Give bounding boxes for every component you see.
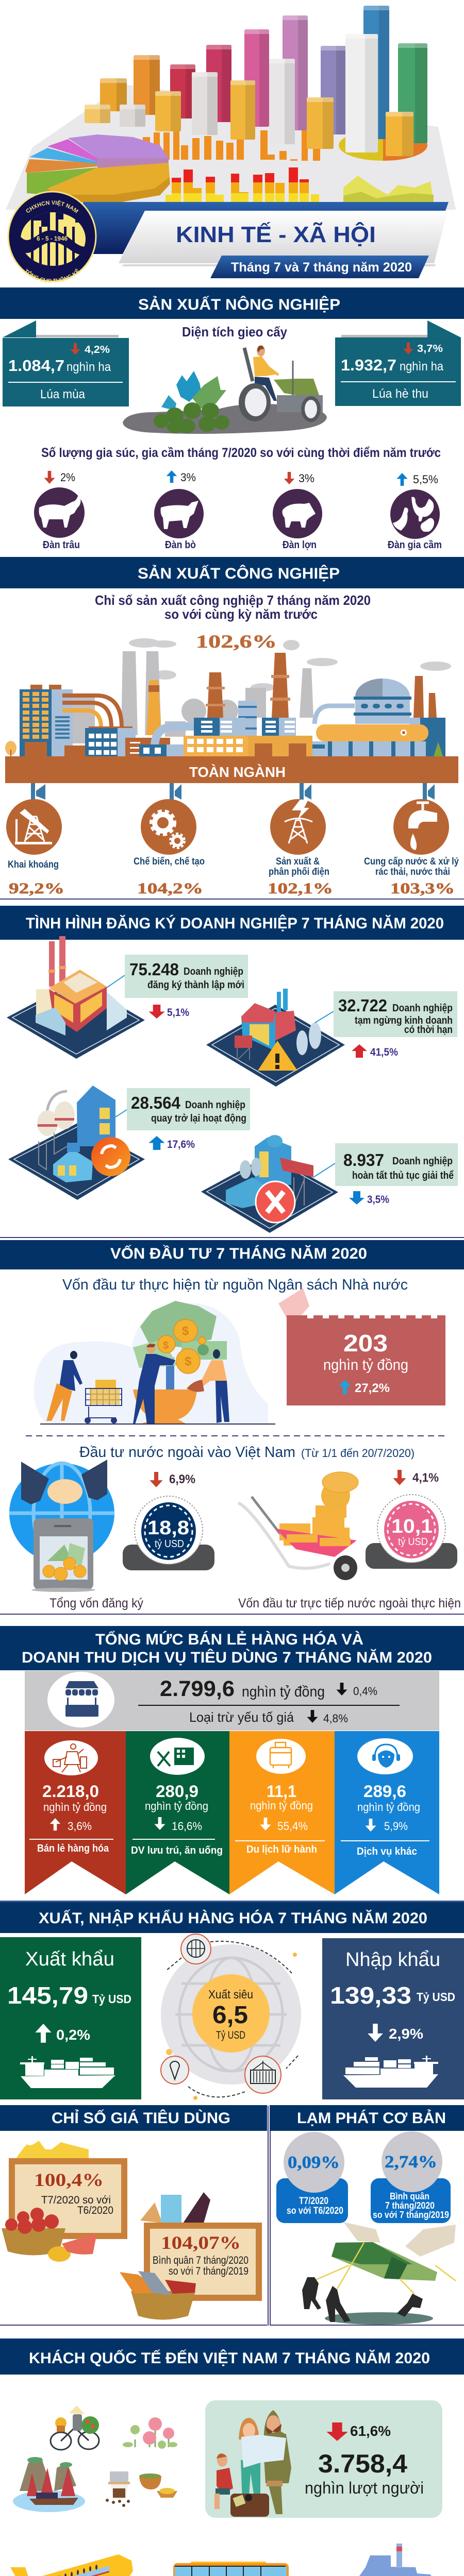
stat: core inflation average: 7 tháng/2020	[385, 2200, 435, 2211]
card: air	[6, 2554, 150, 2576]
illustration: suspended enterprise	[206, 989, 345, 1087]
column: other services: 5,9%	[384, 1820, 408, 1833]
panel: imports	[322, 1938, 464, 2099]
stat: dissolved enterprises: 8.937	[343, 1150, 384, 1170]
panel: retail total: Loại trừ yếu tố giá	[189, 1709, 294, 1725]
heading: industrial production index: so với cùng kỳ năm trước	[164, 606, 318, 622]
logo: Tổng cục Thống kê: CHXHCN VIỆT NAM	[26, 200, 78, 213]
section heading: core inflation	[270, 2105, 464, 2131]
section heading: trade: XUẤT, NHẬP KHẨU HÀNG HÓA 7 THÁNG NĂM 2020	[39, 1909, 427, 1927]
column: travel: Du lịch lữ hành	[246, 1844, 317, 1855]
panel: exports: Tỷ USD	[92, 1992, 131, 2006]
chart: trade surplus globe: 6,5	[212, 2002, 248, 2029]
title banner	[83, 202, 449, 278]
panel: retail total: 0,4%	[353, 1685, 377, 1698]
illustration: winged money	[302, 2222, 456, 2325]
card: sea	[317, 2544, 459, 2576]
panel: total tourists: nghìn lượt người	[305, 2479, 424, 2497]
panel: exports: 0,2%	[56, 2027, 90, 2043]
column: travel: 11,1	[267, 1782, 296, 1801]
illustration: tourist family	[214, 2410, 291, 2517]
stat: registered capital badge: 18,8	[147, 1517, 189, 1539]
item: pigs	[273, 472, 322, 551]
illustration: new enterprise factory	[7, 936, 145, 1059]
section heading: retail	[0, 1626, 464, 1670]
illustration: money tree: $	[163, 1340, 169, 1351]
stat: implemented FDI badge: tỷ USD	[398, 1536, 428, 1548]
heading: state budget investment: Vốn đầu tư thực hiện từ nguồn Ngân sách Nhà nước	[62, 1277, 408, 1293]
value: overall index: 102,6%	[196, 631, 277, 652]
heading: industrial production index	[95, 592, 371, 622]
panel: Lúa hè thu: 3,7%	[417, 343, 443, 354]
item: pigs: Đàn lợn	[283, 539, 317, 551]
stat: suspended enterprises: 41,5%	[370, 1046, 398, 1058]
item: cattle	[154, 470, 204, 551]
section heading: trade	[0, 1901, 464, 1933]
stat: core inflation July: T7/2020	[299, 2196, 328, 2207]
sign: CPI July: T7/2020 so với	[41, 2194, 111, 2206]
column: other services: 289,6	[363, 1782, 406, 1801]
panel: Lúa hè thu: Lúa hè thu	[372, 387, 428, 401]
sign: CPI July: 100,4%	[34, 2170, 104, 2190]
logo: Tổng cục Thống kê	[7, 191, 97, 283]
stat: core inflation average: 2,74%	[385, 2153, 437, 2172]
stat: suspended enterprises	[334, 991, 457, 1058]
stat: new enterprises: Doanh nghiệp	[184, 966, 243, 977]
item: buffalo: Đàn trâu	[43, 539, 80, 551]
panel: exports: 145,79	[7, 1982, 88, 2009]
item: cattle: Đàn bò	[165, 539, 196, 551]
stat: implemented FDI badge	[366, 1470, 457, 1569]
column: accommodation and food: DV lưu trú, ăn uống	[131, 1845, 223, 1856]
column: other services: Dịch vụ khác	[357, 1846, 417, 1857]
heading: foreign investment: (Từ 1/1 đến 20/7/2020)	[301, 1447, 415, 1460]
panel: state budget value: 203	[343, 1330, 388, 1357]
column: travel: nghìn tỷ đồng	[250, 1799, 313, 1812]
panel: state budget value	[278, 1288, 445, 1405]
illustration: wheelbarrow and coins	[238, 1472, 461, 1611]
item: poultry: Đàn gia cầm	[388, 539, 442, 551]
item: electricity: 102,1%	[268, 880, 333, 897]
logo: Tổng cục Thống kê: 6 - 5 - 1946	[37, 235, 68, 242]
stat: registered capital badge	[123, 1472, 214, 1570]
section heading: industry	[0, 557, 464, 588]
stat: core inflation average: Bình quân	[390, 2191, 429, 2201]
panel: Lúa mùa	[3, 320, 129, 406]
item: manufacturing: 104,2%	[137, 880, 203, 897]
section heading: enterprises	[0, 906, 464, 940]
column: travel	[229, 1731, 335, 1894]
heading: foreign investment: Đầu tư nước ngoài vào Việt Nam	[79, 1444, 295, 1461]
heading: planted area: Diện tích gieo cấy	[182, 324, 287, 340]
heading: industrial production index: Chỉ số sản xuất công nghiệp 7 tháng năm 2020	[95, 592, 371, 608]
section heading: agriculture: SẢN XUẤT NÔNG NGHIỆP	[138, 296, 340, 313]
sign: CPI July: T6/2020	[77, 2205, 113, 2216]
panel: retail total: 2.799,6	[160, 1676, 235, 1701]
column: accommodation and food: 280,9	[156, 1782, 198, 1801]
panel: Lúa mùa: 4,2%	[85, 344, 110, 355]
panel: Lúa hè thu: nghìn ha	[400, 360, 444, 374]
section heading: enterprises: TÌNH HÌNH ĐĂNG KÝ DOANH NGHIỆP 7 THÁNG NĂM 2020	[26, 914, 444, 932]
column: travel: 55,4%	[277, 1820, 308, 1833]
heading: foreign investment	[79, 1444, 415, 1461]
panel: total tourists: 61,6%	[350, 2423, 391, 2439]
band: whole industry: TOÀN NGÀNH	[189, 764, 286, 780]
panel: Lúa mùa: nghìn ha	[67, 360, 111, 374]
sign: CPI seven-month average	[120, 2192, 259, 2319]
item: manufacturing	[134, 783, 205, 897]
stat: dissolved enterprises: 3,5%	[367, 1194, 389, 1206]
panel: Lúa hè thu: 1.932,7	[341, 356, 396, 374]
illustration: money tree: $	[182, 1324, 189, 1338]
card: road	[163, 2562, 307, 2576]
chart: trade surplus globe: Tỷ USD	[216, 2029, 245, 2041]
item: water supply	[364, 783, 459, 897]
illustration: handshake and donation box: Tổng vốn đăng ký	[49, 1596, 143, 1611]
column: retail of goods	[25, 1731, 126, 1894]
panel: imports: 2,9%	[389, 2026, 423, 2042]
section heading: tourists	[0, 2338, 464, 2375]
illustration: money tree: $	[185, 1354, 192, 1368]
illustration: Vietnam travel icons	[13, 2405, 177, 2512]
sign: CPI seven-month average: 104,07%	[161, 2232, 241, 2253]
stat: core inflation July: 0,09%	[288, 2153, 340, 2172]
item: electricity	[268, 783, 333, 897]
item: buffalo	[34, 471, 85, 551]
panel: retail total: nghìn tỷ đồng	[242, 1684, 325, 1700]
column: retail of goods: nghìn tỷ đồng	[43, 1801, 107, 1814]
stat: new enterprises: 75.248	[129, 960, 179, 979]
item: electricity: phân phối điện	[269, 867, 329, 877]
section heading: industry: SẢN XUẤT CÔNG NGHIỆP	[138, 565, 340, 582]
section heading: retail: DOANH THU DỊCH VỤ TIÊU DÙNG 7 THÁNG NĂM 2020	[22, 1649, 432, 1666]
stat: suspended enterprises: tạm ngừng kinh doanh	[355, 1015, 453, 1026]
panel: total tourists: 3.758,4	[318, 2449, 407, 2478]
logo: Tổng cục Thống kê: TỔNG CỤC THỐNG KÊ	[25, 269, 78, 283]
stat: registered capital badge: tỷ USD	[155, 1538, 184, 1550]
stat: suspended enterprises: Doanh nghiệp	[392, 1003, 453, 1014]
column: retail of goods: 3,6%	[68, 1820, 92, 1833]
section heading: CPI: CHỈ SỐ GIÁ TIÊU DÙNG	[52, 2109, 230, 2127]
panel: Lúa hè thu	[335, 320, 461, 406]
item: buffalo: 2%	[60, 471, 75, 484]
stat: returning enterprises: 17,6%	[167, 1139, 195, 1150]
illustration: dissolved enterprise	[201, 1135, 338, 1233]
item: manufacturing: Chế biến, chế tạo	[134, 856, 205, 867]
panel: retail total	[25, 1671, 439, 1731]
item: water supply: rác thải, nước thải	[375, 867, 450, 877]
panel: Lúa mùa: Lúa mùa	[40, 387, 86, 401]
stat: new enterprises: 5,1%	[167, 1007, 189, 1019]
chart: trade surplus globe: Xuất siêu	[208, 1988, 253, 2001]
stat: returning enterprises: quay trở lại hoạt động	[151, 1113, 246, 1124]
stat: dissolved enterprises	[335, 1143, 458, 1206]
stat: core inflation July: so với T6/2020	[287, 2206, 343, 2216]
item: electricity: Sản xuất &	[276, 856, 320, 867]
panel: total tourists	[205, 2400, 442, 2518]
stat: core inflation average	[371, 2131, 451, 2223]
panel: imports: 139,33	[330, 1982, 411, 2009]
sign: CPI July	[2, 2141, 124, 2262]
item: cattle: 3%	[180, 471, 196, 484]
panel: state budget value: 27,2%	[355, 1381, 390, 1395]
panel: Lúa mùa: 1.084,7	[8, 357, 64, 375]
stat: new enterprises	[125, 955, 248, 1019]
stat: implemented FDI badge: 4,1%	[412, 1471, 439, 1485]
panel: imports: Tỷ USD	[417, 1990, 455, 2004]
column: other services	[335, 1731, 439, 1894]
item: pigs: 3%	[299, 472, 314, 485]
section heading: agriculture	[0, 287, 464, 319]
illustration: factory	[5, 638, 451, 756]
illustration: returning enterprise	[8, 1086, 145, 1200]
column: retail of goods: Bán lẻ hàng hóa	[37, 1843, 109, 1854]
stat: suspended enterprises: 32.722	[338, 996, 387, 1015]
column: accommodation and food: 16,6%	[172, 1820, 202, 1833]
stat: returning enterprises: Doanh nghiệp	[185, 1099, 245, 1111]
stat: core inflation July	[276, 2132, 348, 2223]
item: poultry: 5,5%	[413, 473, 438, 486]
item: mining	[6, 783, 64, 897]
panel: retail total: 4,8%	[323, 1712, 348, 1725]
stat: registered capital badge: 6,9%	[169, 1472, 195, 1486]
section heading: retail: TỔNG MỨC BÁN LẺ HÀNG HÓA VÀ	[95, 1631, 363, 1648]
section heading: CPI	[0, 2105, 267, 2131]
illustration: money tree	[34, 1301, 275, 1425]
stat: returning enterprises	[127, 1088, 250, 1150]
band: whole industry	[5, 756, 458, 783]
column: other services: nghìn tỷ đồng	[357, 1801, 420, 1814]
item: poultry	[388, 473, 442, 551]
stat: dissolved enterprises: Doanh nghiệp	[392, 1156, 453, 1167]
header illustration: 3D charts	[6, 6, 456, 210]
column: retail of goods: 2.218,0	[42, 1782, 99, 1801]
title text: KINH TẾ - XÃ HỘI	[176, 221, 376, 247]
column: accommodation and food: nghìn tỷ đồng	[145, 1800, 208, 1812]
item: mining: 92,2%	[9, 880, 64, 897]
panel: imports: Nhập khẩu	[345, 1949, 440, 1971]
panel: state budget value: nghìn tỷ đồng	[323, 1357, 408, 1374]
sign: CPI seven-month average: Bình quân 7 tháng/2020	[153, 2255, 248, 2266]
panel: exports	[0, 1937, 141, 2099]
stat: core inflation average: so với 7 tháng/2019	[373, 2210, 449, 2220]
column: accommodation and food	[126, 1731, 229, 1894]
section heading: investment	[0, 1240, 464, 1269]
stat: suspended enterprises: có thời hạn	[404, 1024, 453, 1036]
stat: new enterprises: đăng ký thành lập mới	[147, 979, 244, 991]
panel: exports: Xuất khẩu	[25, 1948, 114, 1970]
stat: returning enterprises: 28.564	[131, 1093, 181, 1112]
sign: CPI seven-month average: so với 7 tháng/2019	[169, 2265, 248, 2277]
chart: trade surplus globe	[161, 1934, 301, 2100]
illustration: tractor and rice field	[123, 345, 327, 434]
section heading: tourists: KHÁCH QUỐC TẾ ĐẾN VIỆT NAM 7 THÁNG NĂM 2020	[29, 2349, 430, 2367]
item: mining: Khai khoáng	[8, 859, 59, 870]
item: water supply: 103,3%	[390, 880, 455, 897]
section heading: investment: VỐN ĐẦU TƯ 7 THÁNG NĂM 2020	[110, 1245, 367, 1262]
illustration: handshake and donation box	[9, 1460, 143, 1611]
stat: implemented FDI badge: 10,1	[391, 1516, 433, 1537]
section heading: core inflation: LẠM PHÁT CƠ BẢN	[297, 2109, 446, 2127]
subtitle: Tháng 7 và 7 tháng năm 2020	[231, 260, 412, 275]
